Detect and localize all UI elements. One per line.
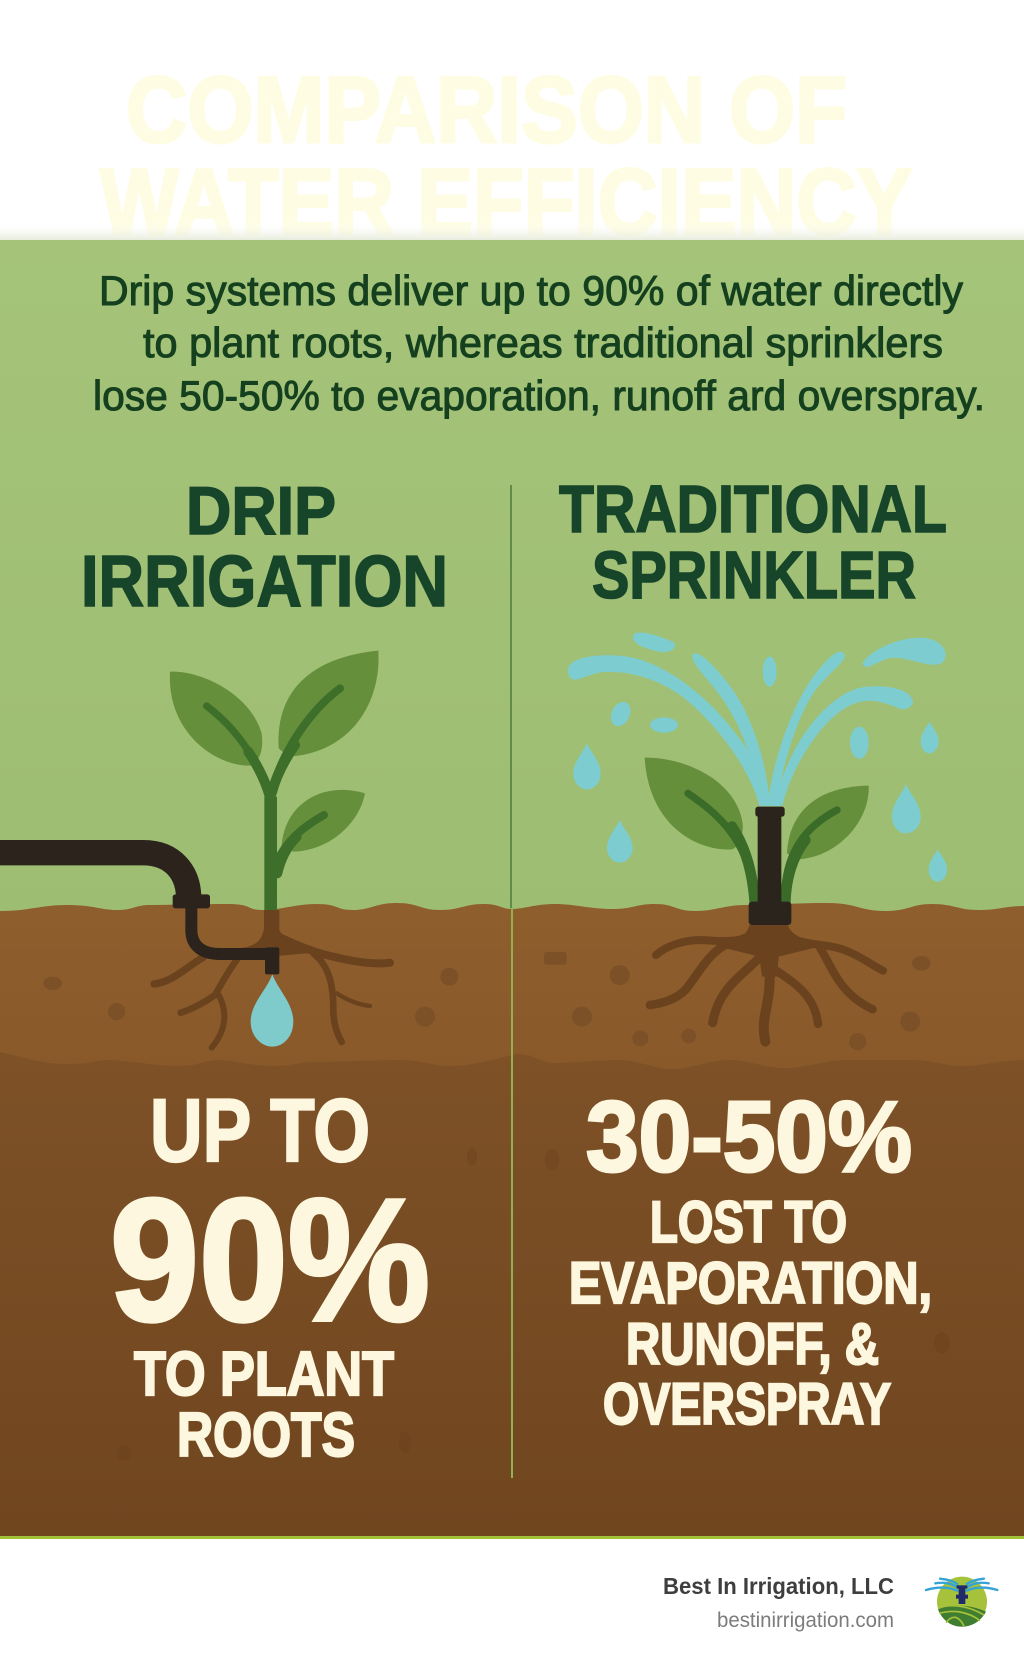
stat: up to 90% <box>110 1080 430 1470</box>
heading: traditional sprinkler: TRADITIONAL <box>559 472 947 547</box>
footer: company name: Best In Irrigation, LLC <box>663 1573 894 1599</box>
intro text: Drip systems deliver up to 90% of water directly <box>99 267 963 314</box>
stat: 30-50% lost: LOST TO <box>650 1190 847 1255</box>
leaf: lower right <box>282 790 365 852</box>
plant veins <box>688 793 837 902</box>
title: WATER EFFICIENCY <box>100 149 912 254</box>
leaf: upper right <box>278 651 379 757</box>
footer accent line <box>0 1536 1024 1539</box>
intro text <box>93 267 985 419</box>
stat: up to 90%: TO PLANT <box>134 1340 394 1409</box>
soil stones: left <box>43 968 458 1027</box>
illustration: traditional sprinkler plant <box>544 633 947 1050</box>
soil stones: right <box>544 952 931 1050</box>
leaf: upper left <box>170 672 262 766</box>
stat: 30-50% lost: OVERSPRAY <box>603 1372 891 1437</box>
panel: sky background <box>0 240 1024 920</box>
title fade edge <box>0 222 1024 240</box>
stat: 30-50% lost: RUNOFF, & <box>626 1312 879 1377</box>
leaf: right <box>787 786 869 859</box>
roots: sprinkler plant <box>650 925 883 1042</box>
water drop: drip emitter <box>251 974 293 1047</box>
stat: up to 90%: UP TO <box>150 1080 370 1180</box>
stat: 30-50% lost <box>569 1081 932 1437</box>
heading: traditional sprinkler: SPRINKLER <box>592 538 916 613</box>
stat: 30-50% lost: 30-50% <box>586 1081 912 1193</box>
divider: lower <box>511 908 513 1478</box>
heading: drip irrigation: IRRIGATION <box>81 542 448 622</box>
water spray: streams <box>569 633 945 805</box>
stat: 30-50% lost: EVAPORATION, <box>569 1251 932 1316</box>
footer: logo <box>926 1577 997 1627</box>
plant stem and veins <box>207 688 340 913</box>
heading: drip irrigation <box>81 473 448 622</box>
pipe: drip line <box>0 853 279 974</box>
panel: topsoil <box>0 903 1024 1100</box>
intro text: to plant roots, whereas traditional sprinklers <box>143 319 943 366</box>
heading: traditional sprinkler <box>559 472 947 613</box>
sprinkler head <box>749 807 791 925</box>
water droplets <box>573 657 947 882</box>
footer: website: bestinirrigation.com <box>717 1609 894 1632</box>
soil speckles: deep <box>117 1148 950 1461</box>
stat: up to 90%: ROOTS <box>177 1401 355 1470</box>
stat: up to 90%: 90% <box>110 1162 430 1357</box>
leaf: left <box>645 758 743 849</box>
intro text: lose 50-50% to evaporation, runoff ard overspray. <box>93 372 985 419</box>
divider: upper <box>510 485 512 908</box>
title <box>100 57 912 254</box>
title: COMPARISON OF <box>126 57 847 162</box>
panel: deep soil <box>0 1052 1024 1537</box>
heading: drip irrigation: DRIP <box>186 473 336 549</box>
roots: drip plant <box>154 910 390 1048</box>
illustration: drip irrigation plant <box>0 651 458 1048</box>
